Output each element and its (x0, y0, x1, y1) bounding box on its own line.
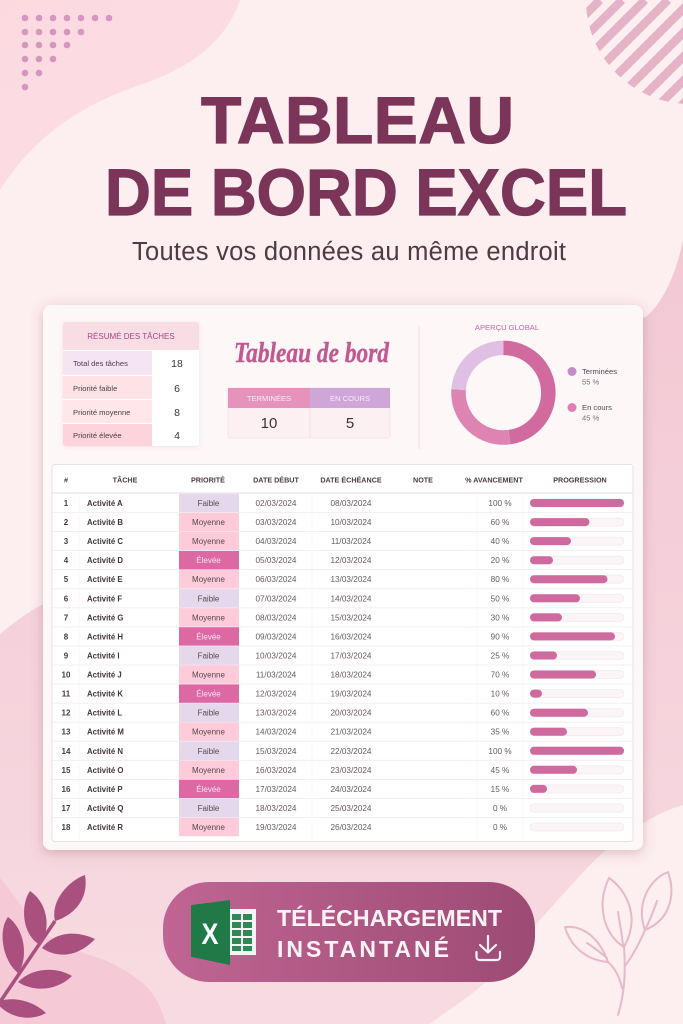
row: Activité O: Activité O (87, 766, 123, 775)
row: Activité E: Activité E (87, 575, 123, 584)
row: Activité G: 15/03/2024 (331, 613, 372, 622)
row: Activité M: 13 (62, 728, 71, 737)
subtitle: Toutes vos données au même endroit (132, 238, 566, 266)
panel: task summary: Priorité élevée (73, 431, 122, 440)
row: Activité F: 6 (64, 594, 69, 603)
row: Activité L: 12 (62, 709, 71, 718)
button label: INSTANTANÉ (277, 935, 449, 962)
panel: dashboard card (43, 305, 643, 850)
table header: TÂCHE (113, 476, 138, 484)
row: Activité H: Activité H (87, 632, 123, 641)
row: Activité J: Activité J (87, 670, 122, 680)
row: Activité I (64, 646, 624, 665)
row: Activité B: 2 (64, 518, 69, 527)
decorative dot grid (22, 15, 112, 90)
row: Activité R: Moyenne (192, 823, 226, 832)
row: Activité L: 60 % (491, 709, 509, 718)
row: Activité Q: 25/03/2024 (331, 804, 372, 813)
row: Activité G (64, 608, 624, 627)
row: Activité M: 35 % (491, 728, 509, 737)
background blob: bottom left darker (0, 878, 166, 1024)
row: Activité E: 5 (64, 575, 69, 584)
title: DE BORD EXCEL (105, 155, 627, 229)
row: Activité R: 0 % (493, 823, 507, 832)
heading: overview: APERÇU GLOBAL (475, 323, 539, 332)
row: Activité R: 18 (62, 823, 71, 832)
row: Activité K: 19/03/2024 (331, 690, 372, 699)
chart legend: En cours (582, 403, 612, 412)
panel: task summary: Priorité moyenne (73, 408, 130, 417)
row: Activité F: 50 % (491, 594, 509, 603)
row: Activité L: Faible (198, 709, 220, 718)
row: Activité J (62, 665, 624, 684)
row: Activité P: Activité P (87, 785, 123, 794)
row: Activité H (64, 627, 624, 646)
row: Activité M: Moyenne (192, 728, 226, 737)
table header: # (64, 476, 68, 484)
row: Activité J: 70 % (491, 670, 509, 680)
row: Activité K: Activité K (87, 690, 123, 699)
row: Activité L: 20/03/2024 (331, 709, 372, 718)
row: Activité P: Élevée (196, 785, 221, 794)
chart legend (568, 367, 617, 422)
row: Activité C (64, 532, 624, 550)
row: Activité I: 17/03/2024 (331, 652, 372, 660)
panel: completed and in-progress counters: 5 (346, 415, 354, 432)
call-to-action button (163, 882, 535, 982)
row: Activité B: 10/03/2024 (331, 518, 372, 527)
panel: completed and in-progress counters: 10 (261, 415, 277, 432)
row: Activité F (64, 589, 624, 608)
row: Activité N: Activité N (87, 747, 123, 756)
row: Activité K: 12/03/2024 (256, 690, 297, 699)
row: Activité C: 11/03/2024 (331, 537, 372, 546)
row: Activité Q: Activité Q (87, 804, 123, 813)
row: Activité M: Activité M (87, 728, 124, 737)
row: Activité C: 40 % (491, 537, 509, 546)
row: Activité H: 8 (64, 632, 69, 641)
row: Activité C: Moyenne (192, 537, 226, 546)
icon: Excel logo: X (202, 918, 218, 951)
row: Activité J: 11/03/2024 (256, 670, 297, 680)
row: Activité A: 08/03/2024 (331, 499, 372, 508)
panel: task summary: 18 (171, 358, 183, 370)
background blob: bottom right pale (430, 805, 683, 1024)
row: Activité Q (62, 799, 624, 817)
table header: NOTE (413, 476, 433, 484)
row: Activité D: 4 (64, 556, 69, 565)
row: Activité C: Activité C (87, 537, 123, 546)
row: Activité G: Activité G (87, 613, 123, 622)
row: Activité E: 06/03/2024 (256, 575, 297, 584)
table header: % AVANCEMENT (465, 476, 523, 484)
row: Activité I: Activité I (87, 652, 120, 660)
panel: task summary: 6 (174, 383, 180, 395)
row: Activité O: 16/03/2024 (256, 766, 297, 775)
panel: task summary: Priorité faible (73, 384, 117, 393)
panel: task table (52, 464, 633, 842)
row: Activité L (62, 704, 624, 722)
row: Activité J: 18/03/2024 (331, 670, 372, 680)
row: Activité F: Activité F (87, 594, 122, 603)
row: Activité O: 45 % (491, 766, 509, 775)
panel: task summary: 8 (174, 407, 180, 419)
row: Activité H: 90 % (491, 632, 509, 641)
row: Activité I: 10/03/2024 (256, 652, 297, 660)
row: Activité B: Moyenne (192, 518, 226, 527)
row: Activité B: 03/03/2024 (256, 518, 297, 527)
row: Activité F: 14/03/2024 (331, 594, 372, 603)
row: Activité J: Moyenne (192, 670, 226, 680)
row: Activité D: Activité D (87, 556, 123, 565)
row: Activité E (64, 570, 624, 588)
row: Activité R: 19/03/2024 (256, 823, 297, 832)
illustration: solid leaf branch (0, 875, 95, 1018)
row: Activité Q: 18/03/2024 (256, 804, 297, 813)
row: Activité O: Moyenne (192, 766, 226, 775)
row: Activité A: Faible (198, 499, 220, 508)
row: Activité J: 10 (62, 670, 71, 680)
row: Activité B: Activité B (87, 518, 123, 527)
row: Activité N: 15/03/2024 (256, 747, 297, 756)
row: Activité I: 9 (64, 652, 69, 660)
title (105, 83, 627, 229)
row: Activité N: Faible (198, 747, 220, 756)
title: TABLEAU (201, 83, 514, 157)
row: Activité E: Moyenne (192, 575, 226, 584)
chart legend: 45 % (582, 414, 600, 422)
row: Activité R: 26/03/2024 (331, 823, 372, 832)
row: Activité K: Élevée (196, 690, 221, 699)
row: Activité L: 13/03/2024 (256, 709, 297, 718)
table header: DATE ÉCHÉANCE (320, 476, 382, 484)
row: Activité H: 16/03/2024 (331, 632, 372, 641)
row: Activité L: Activité L (87, 709, 122, 718)
row: Activité P (62, 780, 624, 798)
row: Activité C: 3 (64, 537, 69, 546)
panel: completed and in-progress counters: EN COURS (330, 394, 370, 403)
row: Activité D: 05/03/2024 (256, 556, 297, 565)
row: Activité A: 1 (64, 499, 69, 508)
row: Activité P: 15 % (491, 785, 509, 794)
background blob: middle and lower pink band (0, 240, 683, 1024)
row: Activité C: 04/03/2024 (256, 537, 297, 546)
icon: download arrow (476, 936, 500, 960)
chart legend: 55 % (582, 378, 600, 386)
row: Activité Q: Faible (198, 804, 220, 813)
row: Activité R (62, 818, 624, 836)
row: Activité M: 21/03/2024 (331, 728, 372, 737)
row: Activité B (64, 513, 624, 531)
row: Activité O: 15 (62, 766, 71, 775)
row: Activité I: Faible (198, 652, 220, 660)
row: Activité P: 17/03/2024 (256, 785, 297, 794)
row: Activité K: 10 % (491, 690, 509, 699)
row: Activité A: 02/03/2024 (256, 499, 297, 508)
donut chart (458, 348, 548, 438)
button label: TÉLÉCHARGEMENT (277, 904, 502, 931)
row: Activité M: 14/03/2024 (256, 728, 297, 737)
row: Activité G: 7 (64, 613, 69, 622)
row: Activité K (62, 684, 624, 703)
panel: task summary: Total des tâches (73, 359, 128, 368)
row: Activité N (62, 742, 624, 760)
row: Activité N: 22/03/2024 (331, 747, 372, 756)
row: Activité A (64, 494, 624, 512)
button label (277, 904, 502, 962)
illustration: outlined leaf sprig (565, 872, 671, 1015)
row: Activité H: 09/03/2024 (256, 632, 297, 641)
row: Activité Q: 17 (62, 804, 71, 813)
row: Activité G: Moyenne (192, 613, 226, 622)
row: Activité A: Activité A (87, 499, 123, 508)
table header: PRIORITÉ (191, 476, 225, 484)
row: Activité N: 14 (62, 747, 71, 756)
row: Activité D: 20 % (491, 556, 509, 565)
row: Activité I: 25 % (491, 652, 509, 660)
panel: completed and in-progress counters (228, 388, 390, 438)
panel: task summary: RÉSUMÉ DES TÂCHES (87, 332, 175, 341)
row: Activité P: 16 (62, 785, 71, 794)
panel: completed and in-progress counters: TERMINÉES (247, 394, 291, 403)
icon: Excel logo (191, 900, 256, 965)
table header (64, 476, 607, 484)
table header: DATE DÉBUT (253, 476, 299, 484)
panel: task summary (63, 322, 199, 446)
row: Activité E: 13/03/2024 (331, 575, 372, 584)
row: Activité D (64, 551, 624, 569)
row: Activité F: Faible (198, 594, 220, 603)
row: Activité K: 11 (62, 690, 71, 699)
row: Activité Q: 0 % (493, 804, 507, 813)
table header: PROGRESSION (553, 476, 607, 484)
row: Activité G: 30 % (491, 613, 509, 622)
row: Activité D: Élevée (196, 556, 221, 565)
row: Activité N: 100 % (488, 747, 512, 756)
chart legend: Terminées (582, 367, 617, 376)
row: Activité F: 07/03/2024 (256, 594, 297, 603)
row: Activité O: 23/03/2024 (331, 766, 372, 775)
row: Activité P: 24/03/2024 (331, 785, 372, 794)
panel: task summary: 4 (174, 430, 180, 442)
background blob: top left (0, 0, 240, 190)
row: Activité H: Élevée (196, 632, 221, 641)
row: Activité E: 80 % (491, 575, 509, 584)
row: Activité G: 08/03/2024 (256, 613, 297, 622)
row: Activité R: Activité R (87, 823, 123, 832)
row: Activité M (62, 722, 624, 741)
decorative striped circle (586, 0, 683, 104)
row: Activité D: 12/03/2024 (331, 556, 372, 565)
row: Activité O (62, 761, 624, 779)
row: Activité A: 100 % (488, 499, 512, 508)
row: Activité B: 60 % (491, 518, 509, 527)
heading: Tableau de bord script: Tableau de bord (234, 337, 389, 369)
